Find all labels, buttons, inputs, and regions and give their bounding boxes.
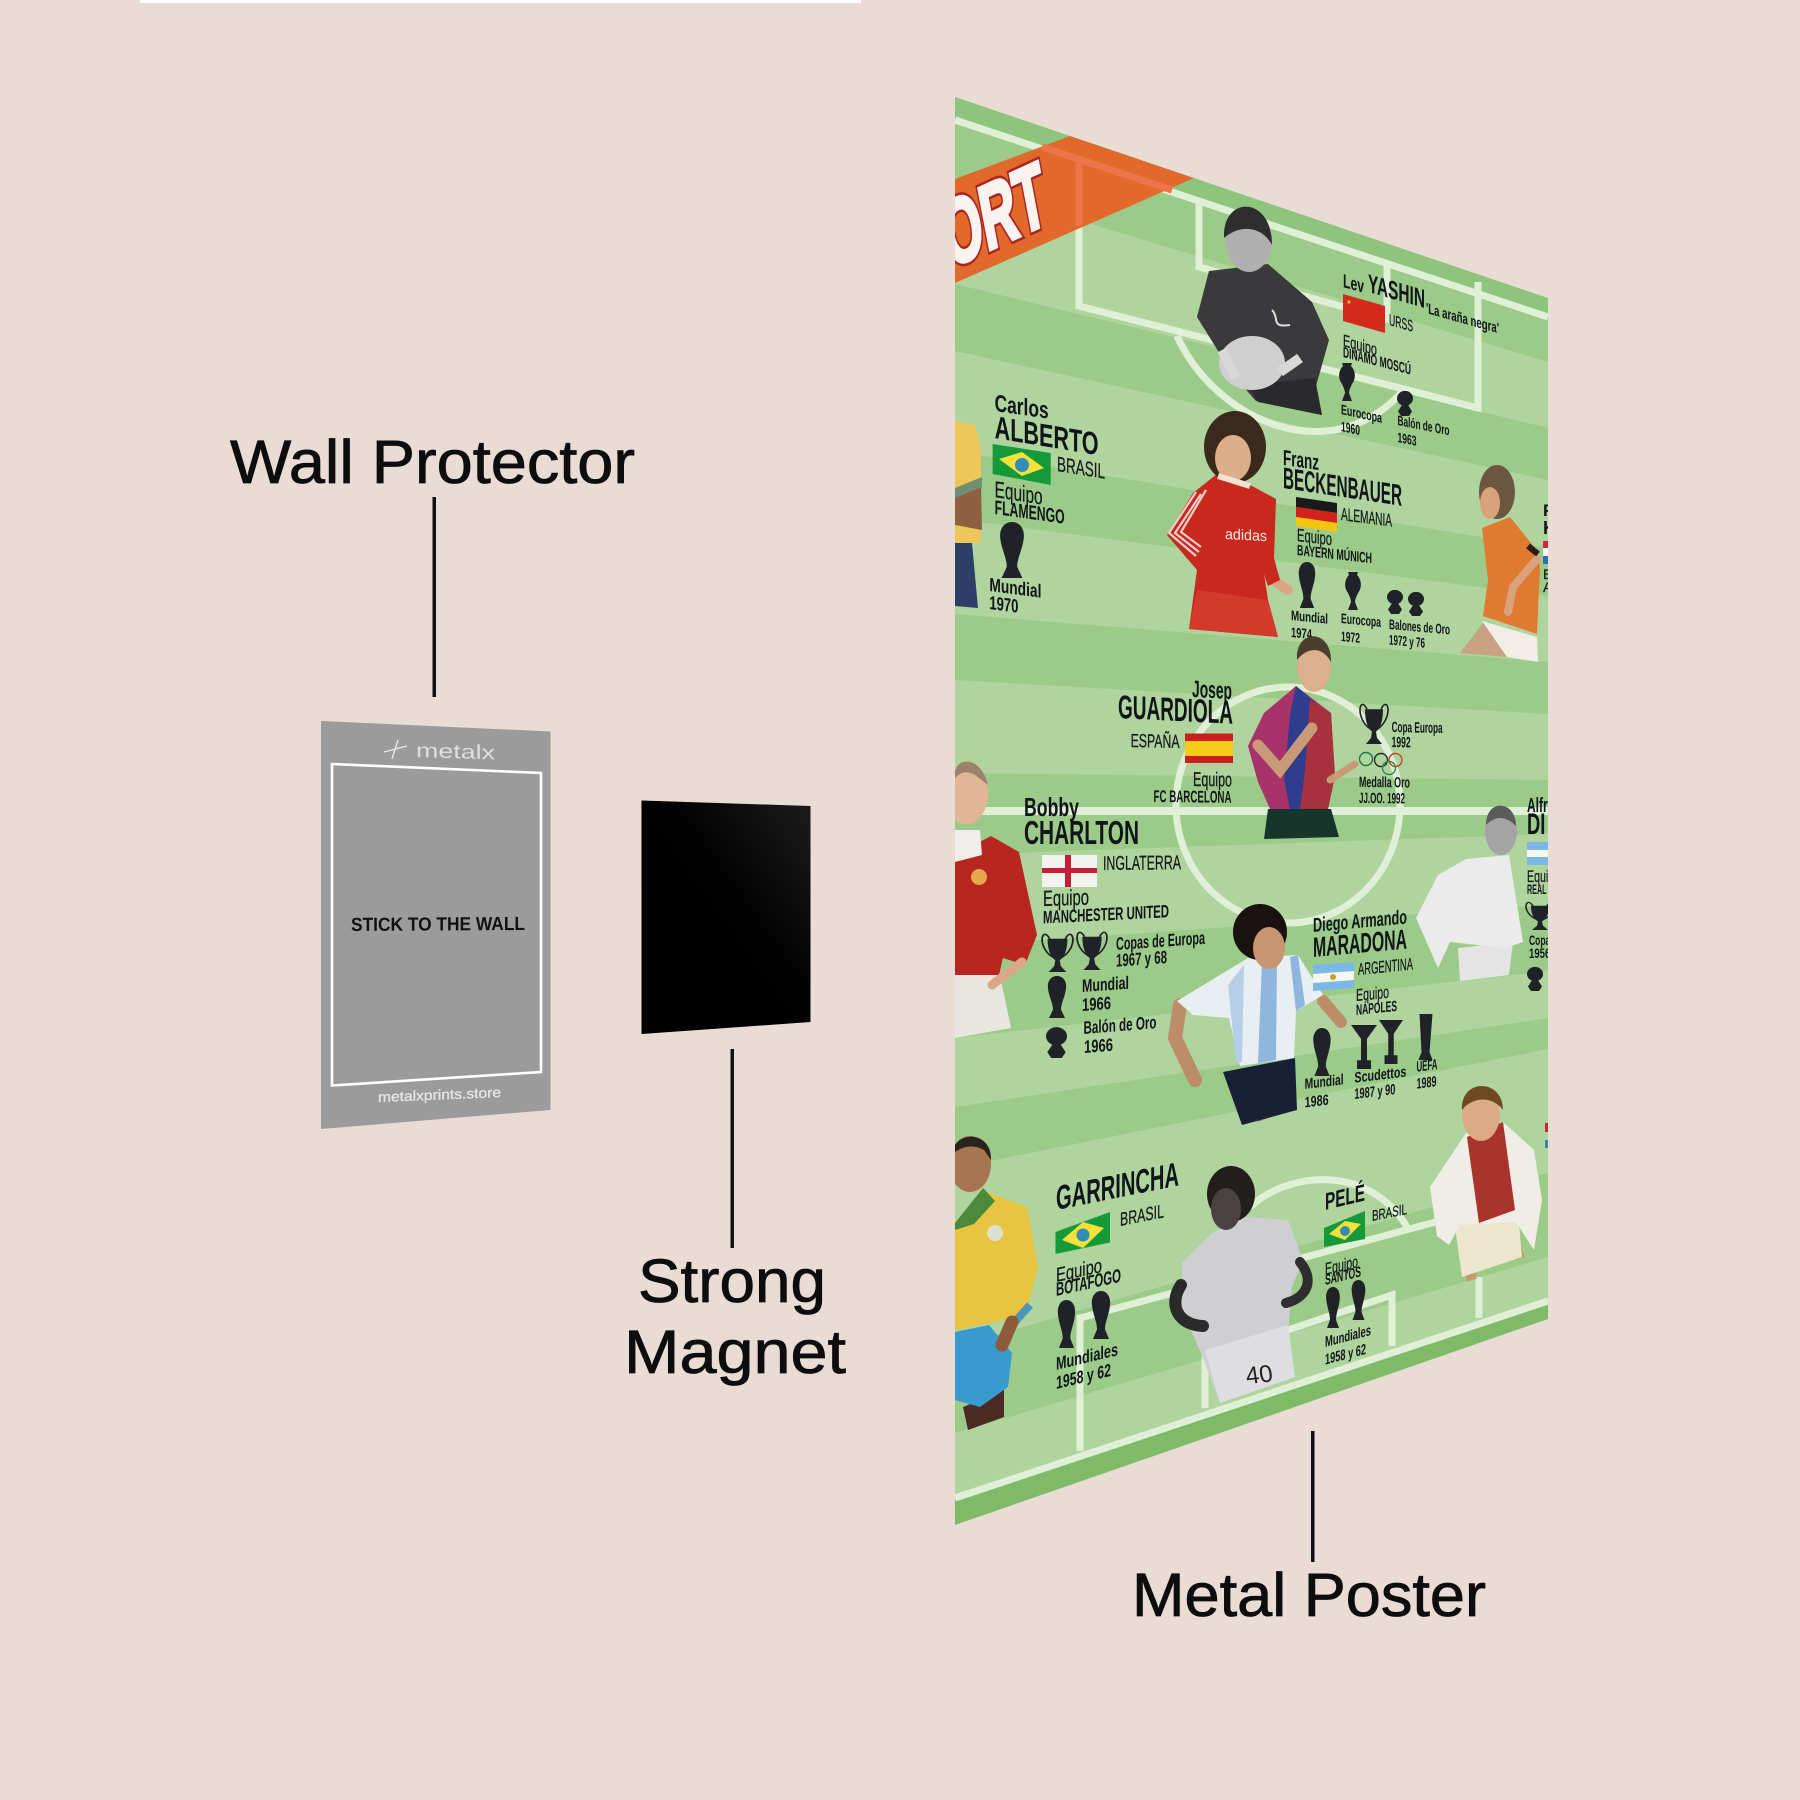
text block: Bobby Charlton: CHARLTON [1024, 814, 1139, 851]
text block: Pele: 1958 y 62 [1325, 1341, 1366, 1369]
text block: Guardiola: ESPAÑA [1131, 730, 1180, 753]
text block: Beckenbauer: Equipo [1297, 525, 1332, 549]
panel: wall protector sheet [321, 721, 550, 1129]
text block: Di Stefano (cropped at poster edge): DI STÉFANO [1527, 807, 1637, 841]
player: Beckenbauer: adidas [1225, 526, 1267, 545]
text block: Yashin: Balón de Oro [1398, 412, 1450, 438]
text block: Bobby Charlton: Copas de Europa [1116, 928, 1206, 954]
text block: Di Stefano (cropped at poster edge): Copas [1529, 932, 1555, 948]
text block: Pele: SANTOS [1325, 1264, 1361, 1289]
text block: Guardiola: Josep [1192, 676, 1232, 705]
text block: Di Stefano (cropped at poster edge): 1956, [1529, 945, 1553, 961]
text block: Bobby Charlton: 1966 [1084, 1035, 1113, 1057]
player: Bobby Charlton [955, 762, 1037, 1038]
text block: Garrincha: BOTAFOGO [1056, 1266, 1121, 1301]
text block: Bobby Charlton: Equipo [1043, 885, 1089, 911]
text block: Carlos Alberto [989, 390, 1105, 618]
text block: Yashin: Lev [1343, 270, 1364, 298]
banner logo text: ORT [935, 143, 1054, 287]
text block: Guardiola: Medalla Oro [1359, 774, 1410, 792]
cropped flag fragments at poster edge [1545, 1123, 1548, 1148]
text block: Bobby Charlton [1024, 792, 1206, 1058]
text block: Yashin: DINAMO MOSCÚ [1343, 343, 1411, 379]
text block: Bobby Charlton: 1967 y 68 [1116, 947, 1167, 971]
text block: Garrincha: BRASIL [1120, 1201, 1164, 1231]
top white strip [140, 0, 861, 3]
text block: Carlos Alberto: Mundial [989, 575, 1041, 603]
text block: Bobby Charlton: Bobby [1024, 792, 1079, 822]
player: Carlos Alberto [955, 421, 982, 608]
text block: Garrincha [1056, 1156, 1179, 1393]
label: Strong Magnet: Magnet [624, 1318, 846, 1386]
text block: Krol (cropped at poster edge): F [1543, 501, 1553, 520]
text block: Di Stefano (cropped at poster edge): REAL MADRID [1527, 881, 1577, 897]
text block: Guardiola [1118, 676, 1443, 807]
text block: Di Stefano (cropped at poster edge): Alfredo [1527, 795, 1569, 817]
text block: Beckenbauer: BAYERN MÚNICH [1297, 541, 1372, 567]
leader line: Wall Protector [432, 497, 436, 697]
flag: Brazil [1056, 1212, 1110, 1254]
player: Ajax shirt [1430, 1086, 1542, 1280]
icon: metalx logo mark [384, 740, 407, 759]
text block: Maradona: ARGENTINA [1358, 955, 1413, 979]
text block: Carlos Alberto: Carlos [995, 390, 1049, 425]
flag: England [1042, 855, 1097, 887]
text block: Guardiola: JJ.OO. 1992 [1359, 790, 1405, 807]
player: Pele: 40 [1244, 1360, 1275, 1390]
flag: Argentina small [1527, 842, 1548, 865]
text block: Guardiola: 1992 [1392, 734, 1411, 751]
text block: Beckenbauer: Mundial [1291, 607, 1328, 627]
panel: black strong magnet [642, 800, 810, 1034]
text block: Pele: BRASIL [1372, 1201, 1407, 1225]
player: Di Stefano [1416, 806, 1523, 981]
player: Pele [1175, 1166, 1308, 1403]
leader line: Strong Magnet [730, 1049, 734, 1248]
text block: Carlos Alberto: ALBERTO [995, 409, 1099, 462]
player: orange Netherlands shirt [1460, 465, 1540, 662]
outer darker edge strips [955, 97, 1548, 317]
player: yellow Brazil shirt [949, 1136, 1038, 1430]
flag: Brazil small [1324, 1211, 1365, 1247]
text block: Krol (cropped at poster edge): A [1543, 579, 1553, 595]
text block: Bobby Charlton: Balón de Oro [1084, 1012, 1156, 1038]
text block: Beckenbauer: ALEMANIA [1341, 504, 1393, 531]
flag: Argentina [1313, 962, 1354, 991]
text block: Maradona: Scudettos [1354, 1064, 1406, 1087]
text block: Beckenbauer: 1974 [1291, 624, 1312, 642]
label: Strong Magnet [624, 1247, 846, 1386]
text block: Yashin: 'La araña negra' [1426, 300, 1499, 337]
text block: Beckenbauer: 1972 y 76 [1389, 632, 1425, 651]
text block: Pele: Equipo [1325, 1251, 1358, 1279]
text block: Maradona: Diego Armando [1313, 907, 1407, 937]
banner logo text: ORT [935, 143, 1054, 287]
pitch markings [955, 120, 1548, 1498]
text block: Beckenbauer: 1972 [1341, 628, 1360, 646]
text: stick to the wall: STICK TO THE WALL [351, 914, 525, 936]
label: Wall Protector: Wall Protector [230, 428, 635, 496]
text block: Bobby Charlton: MANCHESTER UNITED [1043, 901, 1169, 927]
flag: Spain [1185, 734, 1233, 763]
text block: Maradona: NÁPOLES [1356, 998, 1397, 1019]
player: Beckenbauer [1167, 411, 1288, 637]
text block: Bobby Charlton: 1966 [1082, 993, 1111, 1015]
label: Metal Poster: Metal Poster [1132, 1561, 1486, 1629]
text block: Maradona: 1989 [1416, 1073, 1436, 1093]
text block: Guardiola: Copa Europa [1392, 719, 1443, 737]
text block: Maradona: Equipo [1356, 983, 1389, 1005]
text block: Carlos Alberto: Equipo [995, 476, 1043, 510]
text block: Beckenbauer: Eurocopa [1341, 610, 1381, 630]
player: Yashin [1197, 207, 1329, 415]
text block: Pele: Mundiales [1325, 1322, 1371, 1351]
text block: Bobby Charlton: INGLATERRA [1103, 852, 1181, 875]
text block: Garrincha: GARRINCHA [1056, 1156, 1179, 1218]
text block: Beckenbauer: Franz [1283, 445, 1319, 475]
text block: Yashin: YASHIN [1368, 268, 1425, 314]
flag: Germany [1296, 497, 1337, 532]
text block: Garrincha: Equipo [1056, 1255, 1102, 1287]
banner logo text [955, 156, 1043, 266]
text block: Beckenbauer [1283, 445, 1450, 651]
text block: Pele: PELÉ [1325, 1179, 1365, 1216]
text block: Krol (cropped at poster edge): E [1543, 566, 1552, 582]
text block: Maradona: 1986 [1305, 1092, 1329, 1111]
panel: metal poster football pitch [955, 97, 1548, 1525]
text block: Yashin: URSS [1389, 311, 1413, 336]
text block: Krol (cropped at poster edge): K [1543, 518, 1556, 538]
text block: Di Stefano (cropped at poster edge): Equipo [1527, 867, 1560, 886]
pitch base [955, 90, 1555, 1530]
text block: Di Stefano (cropped at poster edge) [1525, 797, 1548, 991]
player: Maradona [1175, 904, 1341, 1125]
icon: Olympic rings [1360, 752, 1402, 774]
text block: Guardiola: FC BARCELONA [1154, 787, 1232, 807]
text block: Bobby Charlton: Mundial [1082, 973, 1129, 996]
text: website: metalxprints.store [378, 1084, 501, 1105]
text block: Maradona: MARADONA [1313, 924, 1407, 963]
text block: Pele [1324, 1179, 1407, 1369]
text block: Maradona: 1987 y 90 [1354, 1081, 1395, 1103]
text block: Carlos Alberto: BRASIL [1057, 453, 1105, 484]
text block: Yashin: Equipo [1343, 330, 1377, 359]
text block: Beckenbauer: BECKENBAUER [1283, 462, 1402, 513]
text block: Garrincha: Mundiales [1056, 1338, 1118, 1374]
flag: Brazil [993, 444, 1051, 485]
text block: Yashin: Eurocopa [1341, 402, 1382, 427]
text block: Maradona [1305, 907, 1438, 1111]
text block: Beckenbauer: Balones de Oro [1389, 616, 1450, 638]
text block: Carlos Alberto: 1970 [989, 593, 1018, 618]
text block: Yashin: 1963 [1398, 429, 1417, 449]
text block: Maradona: UEFA [1416, 1056, 1438, 1076]
player: Guardiola [1248, 636, 1355, 839]
label: Strong Magnet: Strong [638, 1247, 826, 1315]
flag: USSR [1343, 294, 1385, 333]
leader line: Metal Poster [1311, 1431, 1314, 1562]
orange corner banner [955, 136, 1194, 283]
text block: Yashin: 1960 [1341, 419, 1360, 439]
pitch mowing stripes [955, 183, 1548, 1498]
text block: Garrincha: 1958 y 62 [1056, 1359, 1111, 1393]
text block: Carlos Alberto: FLAMENGO [995, 497, 1065, 529]
text block: Krol (cropped at poster edge) [1542, 504, 1548, 592]
text block: Maradona: Mundial [1305, 1071, 1344, 1093]
text block: Guardiola: GUARDIOLA [1118, 688, 1233, 731]
text: metalx brand: metalx [416, 740, 495, 764]
text block: Yashin [1339, 268, 1499, 449]
text block: Guardiola: Equipo [1193, 769, 1232, 791]
